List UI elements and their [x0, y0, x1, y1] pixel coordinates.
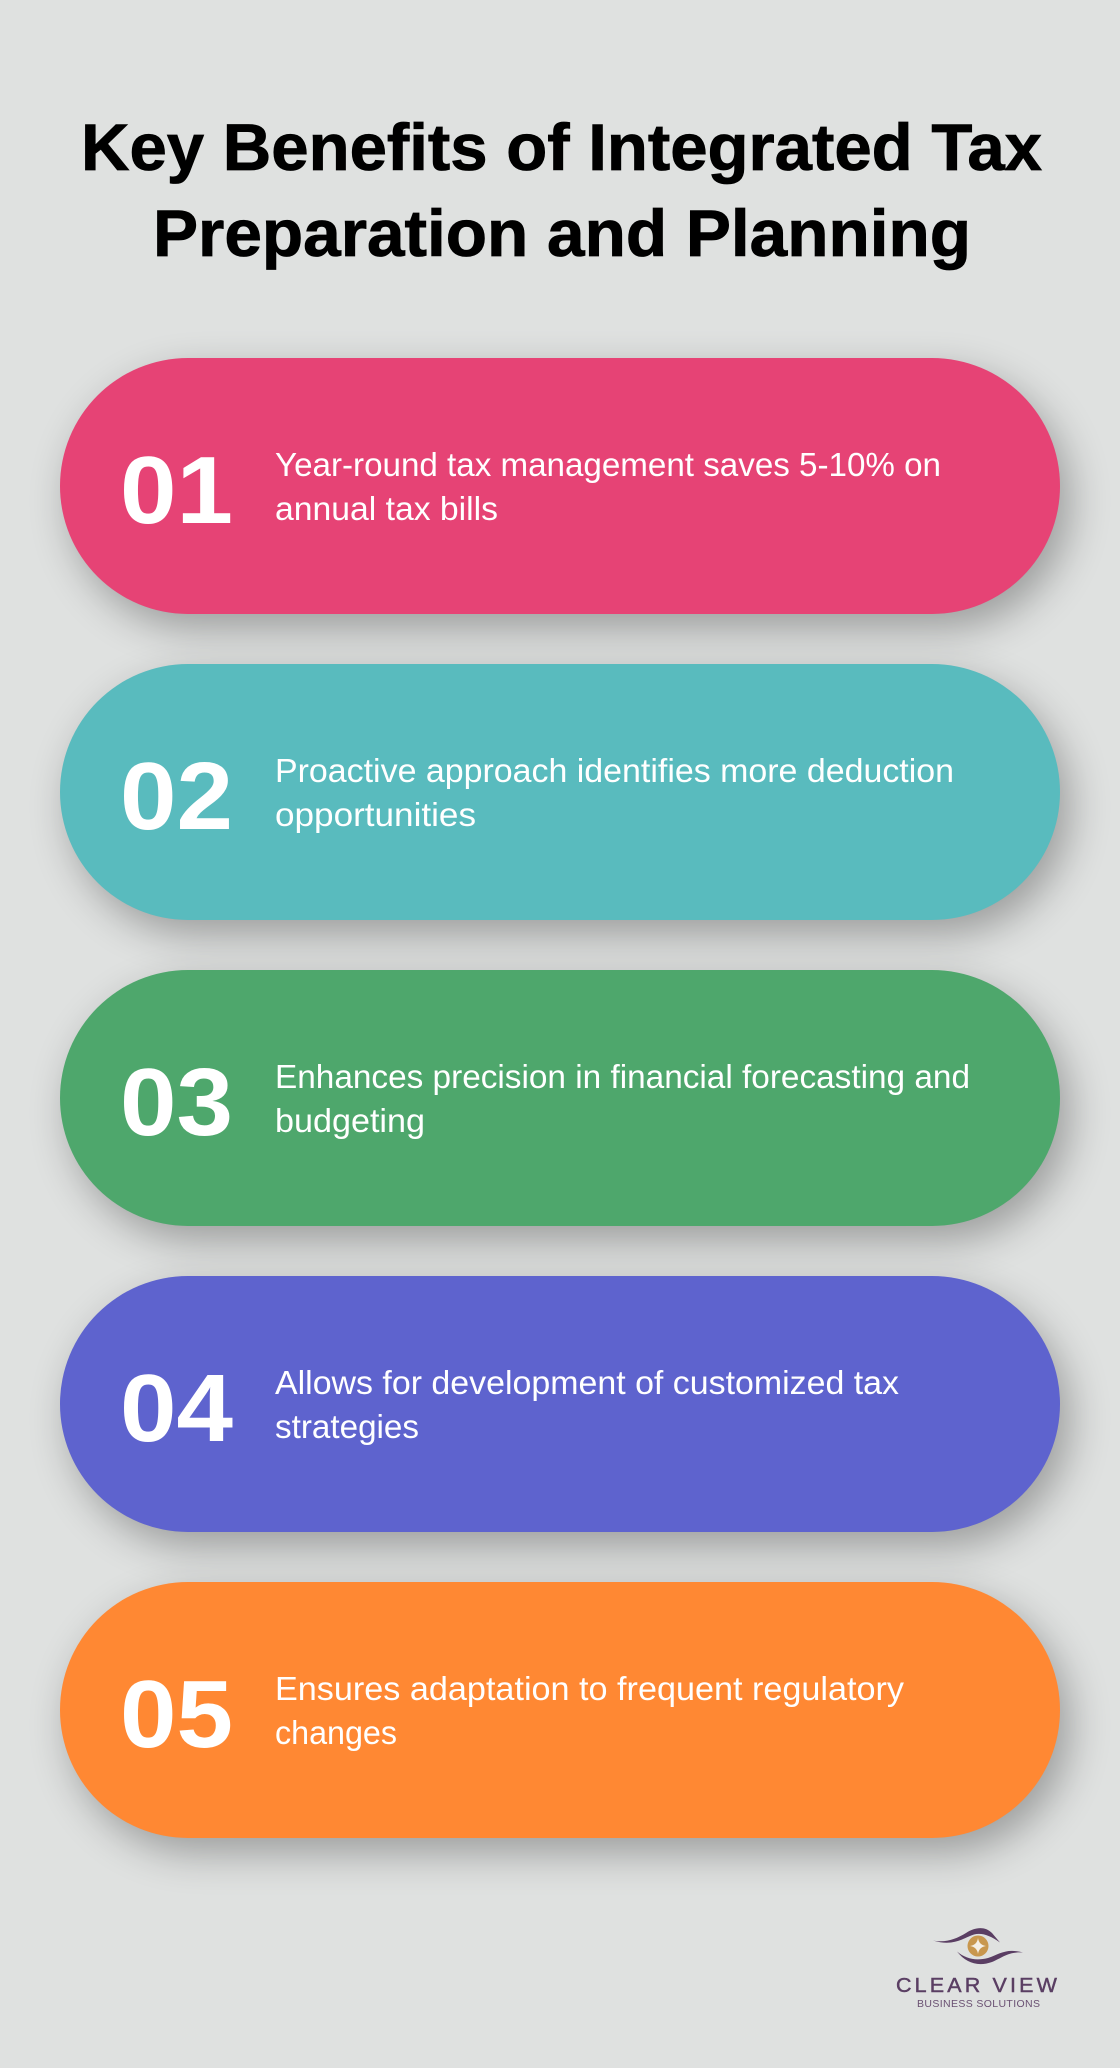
icon: eye upper lid	[933, 1928, 1000, 1943]
panel: benefit 04: strategies	[275, 1408, 419, 1445]
panel: benefit 03: budgeting	[275, 1102, 425, 1139]
panel: benefit 05	[60, 1582, 1060, 1838]
panel: benefit 03	[60, 970, 1060, 1226]
logo tagline: BUSINESS SOLUTIONS	[917, 1998, 1040, 2010]
panel: benefit 01: 01	[120, 437, 233, 544]
panel: benefit 01: annual tax bills	[275, 490, 498, 527]
panel: benefit 04	[60, 1276, 1060, 1532]
title: Preparation and Planning	[153, 196, 971, 270]
panel: benefit 02: 02	[120, 743, 233, 850]
logo wordmark: CLEAR VIEW	[896, 1974, 1060, 1997]
panel: benefit 01	[60, 358, 1060, 614]
panel: benefit 05: 05	[120, 1661, 233, 1768]
panel: benefit 05: changes	[275, 1714, 397, 1751]
title	[81, 110, 1042, 270]
panel: benefit 01: Year-round tax management saves 5-10% on	[275, 446, 941, 483]
icon: gold iris with star	[968, 1936, 988, 1956]
panel: benefit 04: Allows for development of customized tax	[275, 1364, 900, 1401]
panel: benefit 02: opportunities	[275, 796, 476, 833]
panel: benefit 05: Ensures adaptation to frequent regulatory	[275, 1670, 905, 1707]
panel: benefit 04: 04	[120, 1355, 233, 1462]
panel: benefit 03: Enhances precision in financial forecasting and	[275, 1058, 970, 1095]
title: Key Benefits of Integrated Tax	[81, 110, 1042, 184]
icon: eye lower lid	[957, 1951, 1023, 1964]
logo: Clear View Business Solutions	[896, 1928, 1060, 2010]
panel: benefit 03: 03	[120, 1049, 233, 1156]
panel: benefit 02: Proactive approach identifies more deduction	[275, 752, 954, 789]
panel: benefit 02	[60, 664, 1060, 920]
